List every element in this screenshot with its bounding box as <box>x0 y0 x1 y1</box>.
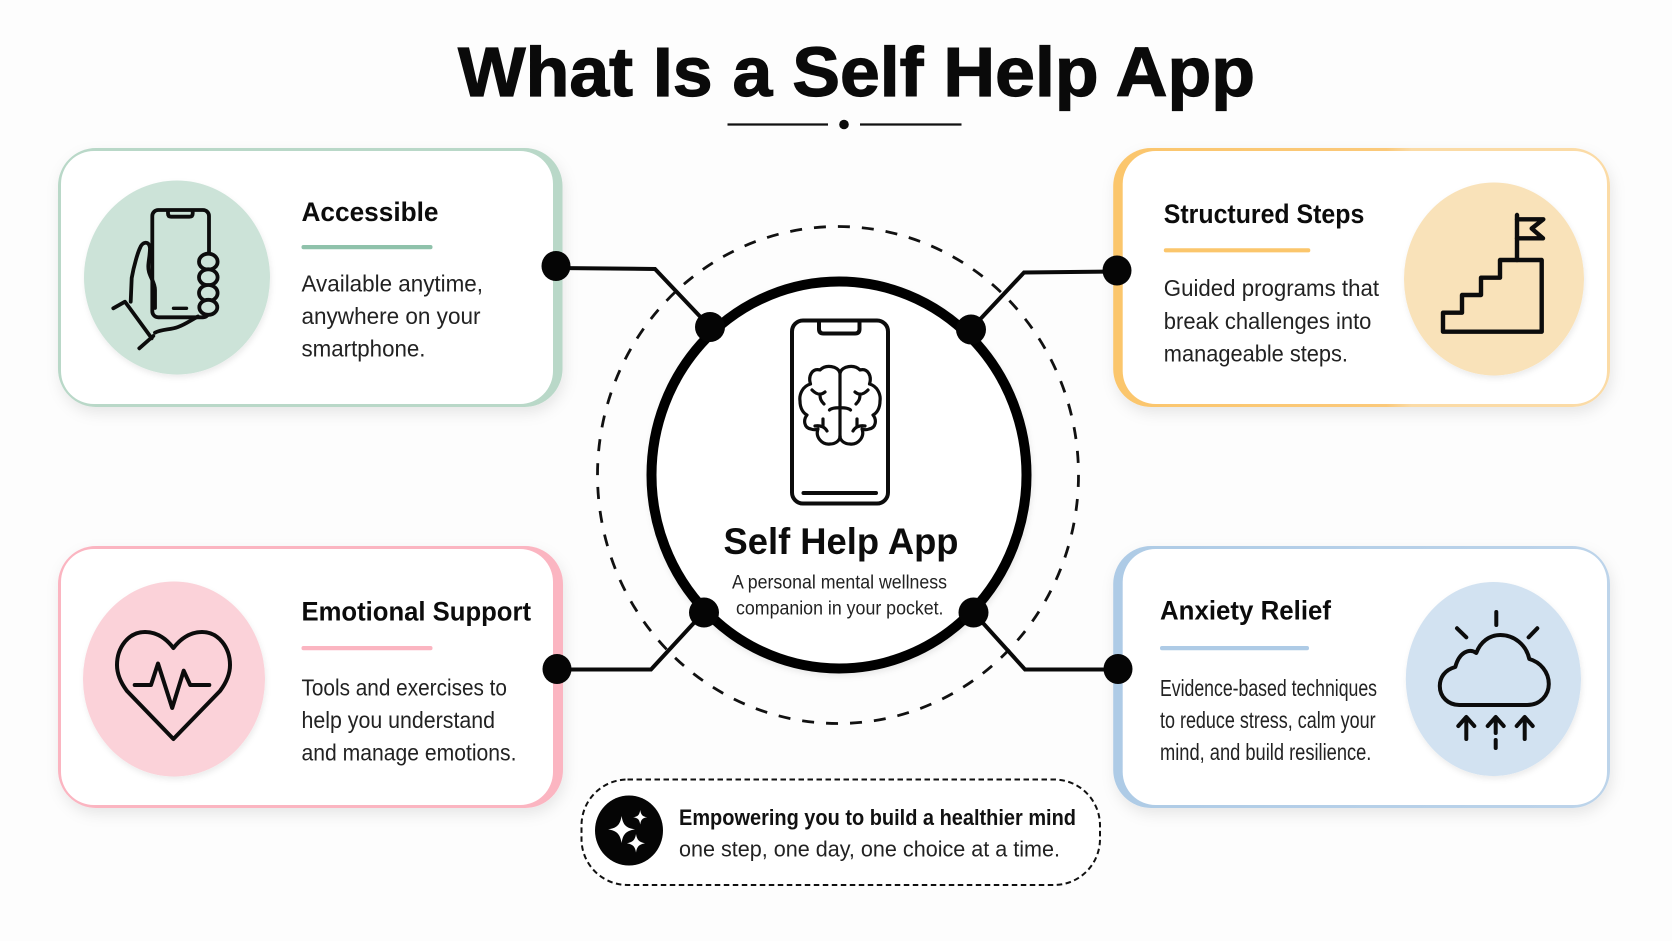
description: help you understand <box>302 707 495 733</box>
connector: Accessible to hub <box>542 251 710 327</box>
accent bar <box>302 646 432 650</box>
accent bar <box>1160 646 1309 650</box>
description <box>1160 675 1377 765</box>
panel: Accessible <box>58 148 562 407</box>
icon disc: yellow <box>1404 182 1584 376</box>
icon: heart with pulse <box>117 632 230 739</box>
hub heading: Self Help App <box>724 521 958 562</box>
description: anywhere on your <box>302 303 481 329</box>
icon: sparkles badge <box>595 796 663 866</box>
callout text <box>679 805 1076 862</box>
description: manageable steps. <box>1164 340 1348 366</box>
callout text: one step, one day, one choice at a time. <box>679 836 1060 862</box>
description <box>302 674 516 766</box>
icon disc: green <box>84 180 270 374</box>
central hub <box>652 282 1026 668</box>
title: What Is a Self Help App <box>458 33 1255 111</box>
description: Tools and exercises to <box>302 674 507 700</box>
dashed orbit ring <box>598 226 1078 724</box>
connector: Structured Steps to hub <box>971 256 1132 329</box>
description: smartphone. <box>302 336 426 362</box>
description: Guided programs that <box>1164 275 1380 301</box>
description: and manage emotions. <box>302 740 516 766</box>
description: Evidence-based techniques <box>1160 675 1377 701</box>
panel: Structured Steps <box>1113 148 1610 407</box>
description: Available anytime, <box>302 270 483 296</box>
callout: empowering message <box>582 780 1100 885</box>
icon: stairs with flag <box>1443 215 1543 332</box>
icon disc: blue <box>1406 582 1581 776</box>
heading: Emotional Support <box>302 596 531 626</box>
accent bar <box>302 245 432 249</box>
hub description: A personal mental wellness <box>732 572 947 594</box>
icon: hand holding phone <box>113 210 218 348</box>
accent bar <box>1164 248 1310 252</box>
hub description <box>732 572 947 620</box>
description <box>1164 275 1380 366</box>
callout text: Empowering you to build a healthier mind <box>679 805 1076 830</box>
description: mind, and build resilience. <box>1160 739 1371 765</box>
hub description: companion in your pocket. <box>736 598 944 620</box>
connector: Emotional Support to hub <box>542 612 704 684</box>
icon disc: pink <box>83 582 265 776</box>
heading: Structured Steps <box>1164 199 1364 229</box>
icon: phone with brain <box>792 320 888 504</box>
connector: Anxiety Relief to hub <box>973 612 1132 684</box>
description: to reduce stress, calm your <box>1160 707 1376 733</box>
title ornament <box>728 120 962 129</box>
panel: Emotional Support <box>58 546 563 808</box>
hub nodes <box>689 312 988 628</box>
hub circle <box>652 282 1026 668</box>
panel: Anxiety Relief <box>1113 546 1610 808</box>
description <box>302 270 483 362</box>
icon: cloud with rays and arrows <box>1440 612 1549 748</box>
heading: Accessible <box>302 197 438 227</box>
description: break challenges into <box>1164 308 1371 334</box>
heading: Anxiety Relief <box>1160 596 1332 626</box>
